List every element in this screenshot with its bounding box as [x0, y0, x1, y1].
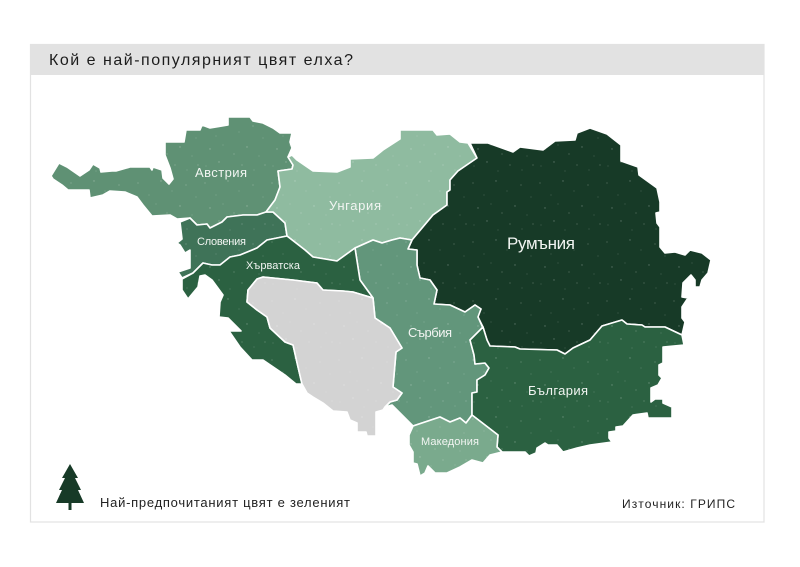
region: Croatia	[182, 236, 373, 384]
region: Bulgaria	[470, 320, 684, 456]
label: Румъния: Румъния	[507, 234, 575, 253]
panel: frame	[30, 44, 764, 522]
label: Словения: Словения	[197, 236, 246, 248]
title bar	[30, 44, 764, 75]
region: Hungary	[266, 130, 477, 261]
region: no data (grey)	[247, 277, 402, 436]
region: Slovenia	[177, 212, 287, 278]
label: Македония: Македония	[421, 436, 479, 448]
label: България: България	[528, 383, 588, 398]
region: Macedonia	[409, 415, 502, 476]
map of countries	[51, 117, 711, 476]
region: Serbia	[355, 238, 489, 426]
label: Унгария: Унгария	[329, 198, 381, 213]
icon: fir tree	[56, 464, 84, 510]
title bar: Кой е най-популярният цвят елха?	[49, 52, 353, 69]
label: Сърбия: Сърбия	[408, 325, 452, 340]
region: Romania	[408, 128, 711, 354]
label: Австрия: Австрия	[195, 165, 247, 180]
legend text: Най-предпочитаният цвят е зеленият	[100, 495, 350, 510]
source: Източник: ГРИПС	[622, 497, 735, 511]
region: Austria	[51, 117, 293, 228]
label: Хърватска: Хърватска	[246, 260, 301, 272]
